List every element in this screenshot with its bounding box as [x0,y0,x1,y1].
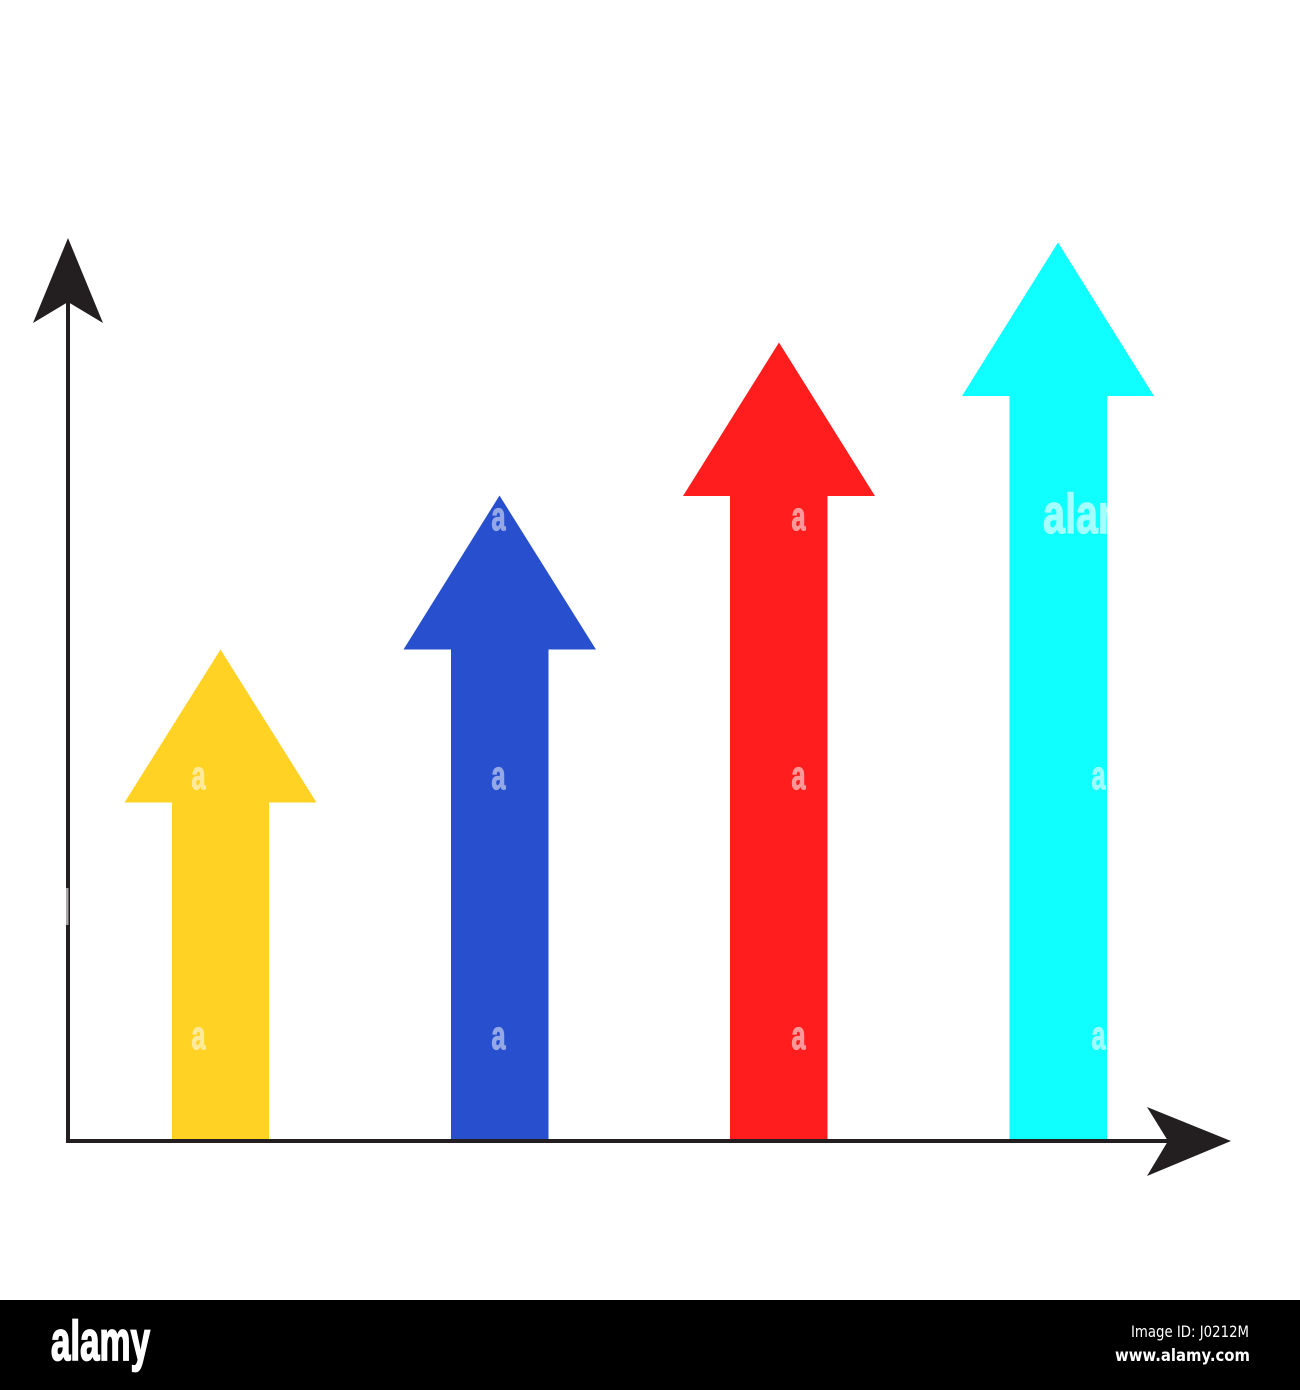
website: www.alamy.com [1115,1346,1250,1366]
arrow: cyan: alam [1043,482,1133,545]
arrow: yellow: a [192,1014,206,1058]
arrow: cyan: a [1092,754,1106,798]
arrow: blue: a [492,495,506,539]
arrow: cyan [962,242,1154,1140]
arrow: red [683,342,875,1140]
arrow: red: a [792,495,806,539]
image id: Image ID: J0212M [1131,1322,1249,1341]
footer band [0,1300,1300,1390]
arrow: red: a [792,754,806,798]
x axis with arrowhead [66,1107,1231,1176]
y axis with arrowhead [33,238,103,1143]
arrow: blue [404,495,596,1140]
arrow: blue: a [492,1014,506,1058]
arrow: red: a [792,1014,806,1058]
arrow: yellow [124,650,316,1140]
arrow: cyan: a [1092,1014,1106,1058]
arrow: yellow: a [192,754,206,798]
arrow: blue: a [492,754,506,798]
footer logo: alamy [51,1309,150,1372]
